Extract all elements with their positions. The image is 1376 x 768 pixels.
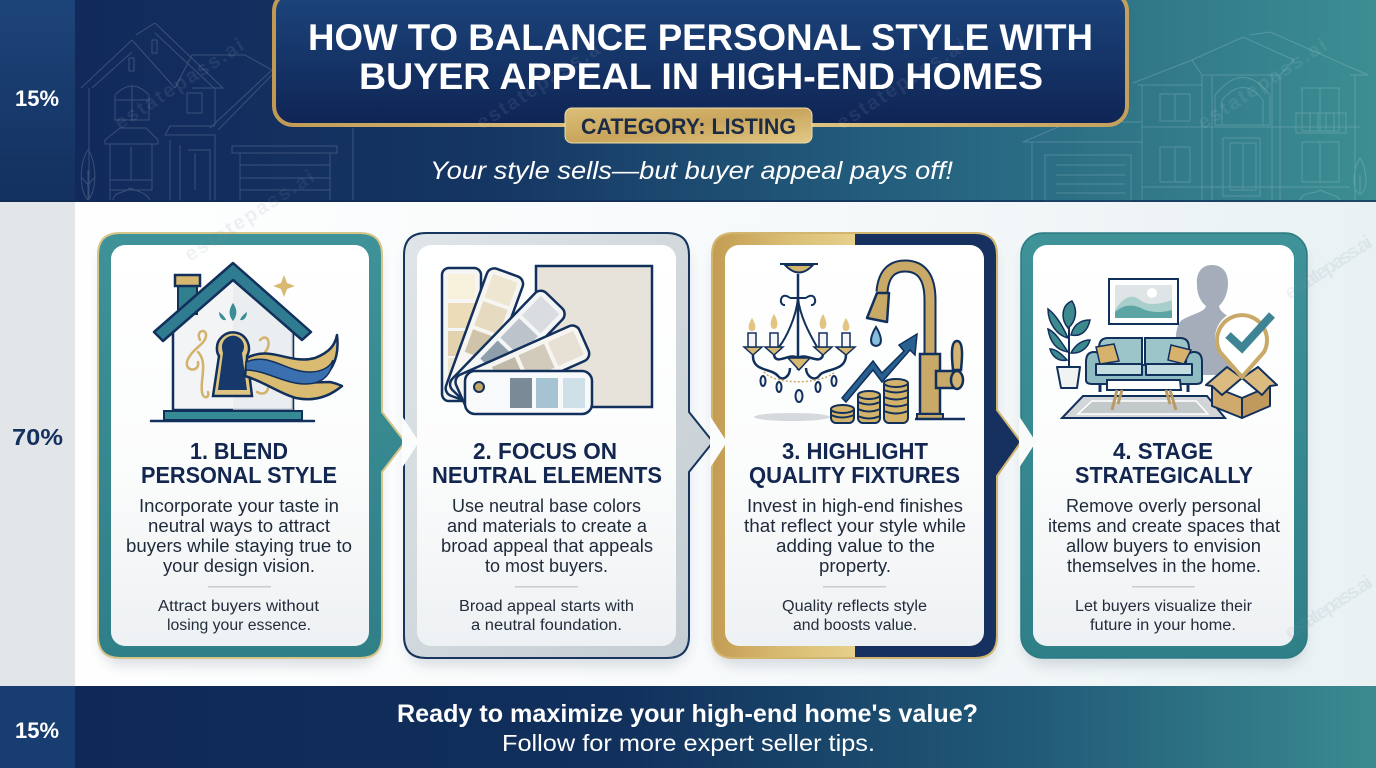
- takeaway: Let buyers visualize their: [1075, 598, 1252, 615]
- body text: [744, 496, 966, 576]
- header watermarks: estatepass.ai: [111, 34, 249, 134]
- body text: items and create spaces that: [1048, 516, 1280, 536]
- icon: gold faucet: [754, 266, 965, 421]
- header watermarks: estatepass.ai: [1194, 34, 1332, 134]
- takeaway: [782, 598, 927, 634]
- body text: Use neutral base colors: [452, 496, 641, 516]
- header bottom edge: [0, 200, 1376, 202]
- body text: property.: [819, 556, 891, 576]
- icon: check mark location pin: [1215, 311, 1272, 377]
- takeaway: losing your essence.: [167, 617, 311, 634]
- panel: card 1 blend personal style: [98, 233, 405, 658]
- heading: STRATEGICALLY: [1075, 462, 1253, 488]
- card drop shadows: [100, 242, 1305, 666]
- card watermarks: estatepass.ai: [1281, 571, 1376, 644]
- heading: [141, 438, 337, 488]
- left percent strip: [0, 0, 75, 202]
- heading: [432, 438, 662, 488]
- call to action: [397, 700, 978, 756]
- takeaway: a neutral foundation.: [471, 617, 622, 634]
- body text: [441, 496, 653, 576]
- call to action: Ready to maximize your high-end home's value?: [397, 700, 978, 728]
- icon: chandelier: [744, 264, 855, 402]
- title text: [308, 17, 1093, 97]
- left house outline: [81, 23, 353, 201]
- card watermarks: [181, 166, 1376, 644]
- heading: [749, 438, 960, 488]
- middle section background: [0, 202, 1376, 686]
- tagline: Your style sells—but buyer appeal pays off!: [430, 157, 953, 185]
- category badge: CATEGORY: LISTING: [581, 114, 796, 139]
- card watermarks: estatepass.ai: [1281, 231, 1376, 304]
- body text: that reflect your style while: [744, 516, 966, 536]
- heading: 3. HIGHLIGHT: [782, 438, 928, 464]
- takeaway: Broad appeal starts with: [459, 598, 634, 615]
- takeaway: Quality reflects style: [782, 598, 927, 615]
- panel: card 3 highlight quality fixtures: [710, 233, 1021, 658]
- body text: themselves in the home.: [1067, 556, 1261, 576]
- body text: your design vision.: [163, 556, 315, 576]
- icon: cardboard box: [1206, 367, 1277, 418]
- header watermarks: [111, 34, 1332, 134]
- header band: [0, 0, 1376, 202]
- icon: stacked gold coins: [831, 379, 908, 423]
- panel: card 4 stage strategically: [1019, 233, 1307, 658]
- icon: house with keyhole: [151, 263, 342, 421]
- body text: [126, 496, 352, 576]
- takeaway: [459, 598, 634, 634]
- heading: 4. STAGE: [1113, 438, 1213, 464]
- takeaway: and boosts value.: [793, 617, 917, 634]
- icon: rising arrow: [842, 334, 917, 402]
- footer percent strip: [0, 686, 75, 768]
- header percent label: 15%: [15, 86, 59, 111]
- body text: to most buyers.: [485, 556, 608, 576]
- takeaway: future in your home.: [1090, 617, 1236, 634]
- panel: card 2 focus on neutral elements: [402, 233, 713, 658]
- icon: staged living room: [1048, 265, 1232, 418]
- body text: and materials to create a: [447, 516, 648, 536]
- body text: Incorporate your taste in: [139, 496, 339, 516]
- takeaway: [1075, 598, 1252, 634]
- body text: buyers while staying true to: [126, 536, 352, 556]
- takeaway: [158, 598, 320, 634]
- right house outline: [1023, 32, 1368, 201]
- heading: 2. FOCUS ON: [473, 438, 617, 464]
- icon: paint swatch fan and textured wall sample: [442, 266, 652, 414]
- body text: [1048, 496, 1280, 576]
- body text: allow buyers to envision: [1066, 536, 1261, 556]
- footer band: [0, 686, 1376, 768]
- title text: BUYER APPEAL IN HIGH-END HOMES: [359, 56, 1043, 97]
- body text: adding value to the: [776, 536, 935, 556]
- middle percent label: 70%: [12, 424, 63, 450]
- footer percent label: 15%: [15, 718, 59, 743]
- body text: Invest in high-end finishes: [747, 496, 963, 516]
- heading: 1. BLEND: [190, 438, 288, 464]
- takeaway: Attract buyers without: [158, 598, 320, 615]
- header watermarks: estatepass.ai: [833, 34, 971, 134]
- heading: PERSONAL STYLE: [141, 462, 337, 488]
- title text: HOW TO BALANCE PERSONAL STYLE WITH: [308, 17, 1093, 58]
- title panel: [274, 0, 1127, 125]
- body text: Remove overly personal: [1066, 496, 1261, 516]
- header watermarks: estatepass.ai: [473, 34, 611, 134]
- heading: QUALITY FIXTURES: [749, 462, 960, 488]
- call to action: Follow for more expert seller tips.: [502, 730, 875, 756]
- card watermarks: estatepass.ai: [181, 166, 319, 266]
- middle percent strip: [0, 202, 75, 686]
- body text: neutral ways to attract: [148, 516, 330, 536]
- body text: broad appeal that appeals: [441, 536, 653, 556]
- heading: NEUTRAL ELEMENTS: [432, 462, 662, 488]
- heading: [1075, 438, 1253, 488]
- category badge: [565, 108, 812, 143]
